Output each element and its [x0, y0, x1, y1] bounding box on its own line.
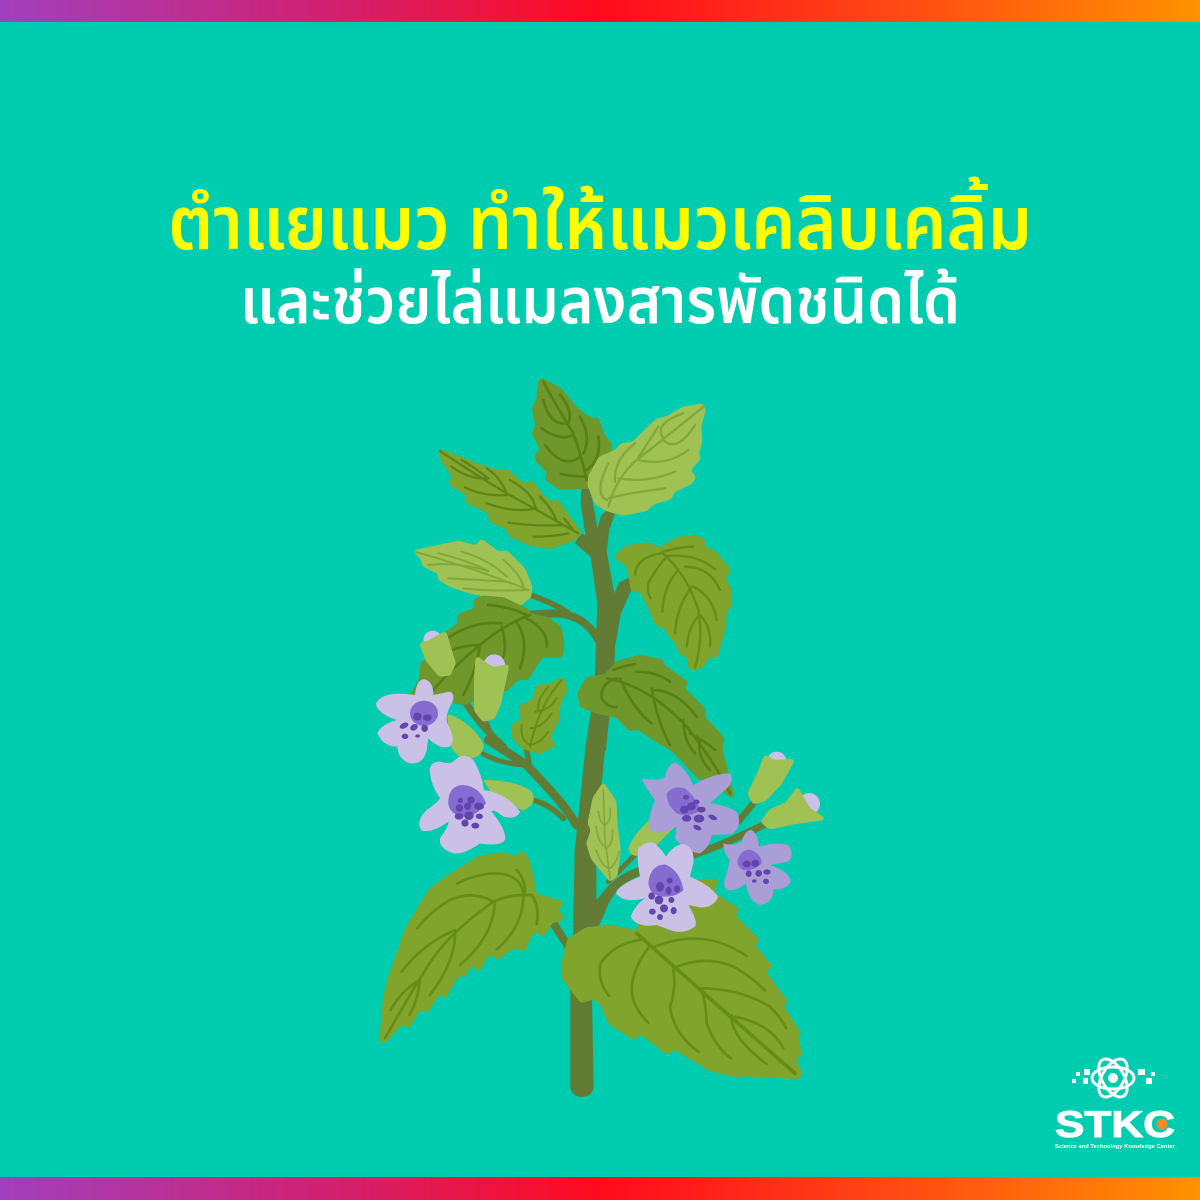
illustration: catnip plant: [376, 380, 823, 1097]
flower: left large: [419, 756, 520, 854]
lower plant parts: [381, 752, 823, 1077]
logo icon: atom: [1072, 1054, 1155, 1102]
leaf: light bean behind flower: [483, 780, 534, 811]
leaf: light top right: [589, 405, 704, 514]
flower: upper left: [376, 679, 453, 763]
leaf: light left: [416, 541, 531, 604]
title: ตำแยแมว ทำให้แมวเคลิบเคลิ้ม: [168, 169, 1032, 283]
bottom gradient bar: [0, 1177, 1200, 1200]
bud: lower right two: [763, 789, 823, 828]
subtitle: และช่วยไล่แมลงสารพัดชนิดได้: [240, 255, 960, 352]
leaf: lower left: [381, 853, 562, 1041]
bud: lower right one: [749, 752, 793, 802]
leaf: dark left middle: [411, 597, 563, 703]
leaf: mid upper left: [440, 451, 580, 547]
bud: upper centre: [476, 654, 507, 720]
stems: [450, 483, 763, 1097]
logo wordmark: STKC: [1055, 1104, 1175, 1145]
leaf: light behind upper-left flower: [447, 713, 484, 759]
leaf: dark right centre: [579, 657, 733, 797]
bud: upper left: [421, 631, 454, 675]
leaf: small vertical light: [588, 784, 619, 880]
top gradient bar: [0, 0, 1200, 22]
leaf: dark top: [534, 380, 610, 488]
flower: right small: [723, 830, 792, 905]
logo orange dot: [1156, 1118, 1168, 1130]
logo: STKC: [1055, 1054, 1176, 1150]
leaf: light behind purple flower: [628, 818, 678, 856]
leaf: bottom large: [563, 881, 801, 1077]
flower: right purple large: [642, 763, 739, 853]
leaf: mid right: [616, 537, 731, 669]
leaf: small centre: [512, 678, 566, 753]
flower: centre large: [616, 842, 718, 932]
leaves upper: [376, 380, 733, 797]
logo tagline: Science and Technology Knowledge Center: [1055, 1144, 1176, 1150]
